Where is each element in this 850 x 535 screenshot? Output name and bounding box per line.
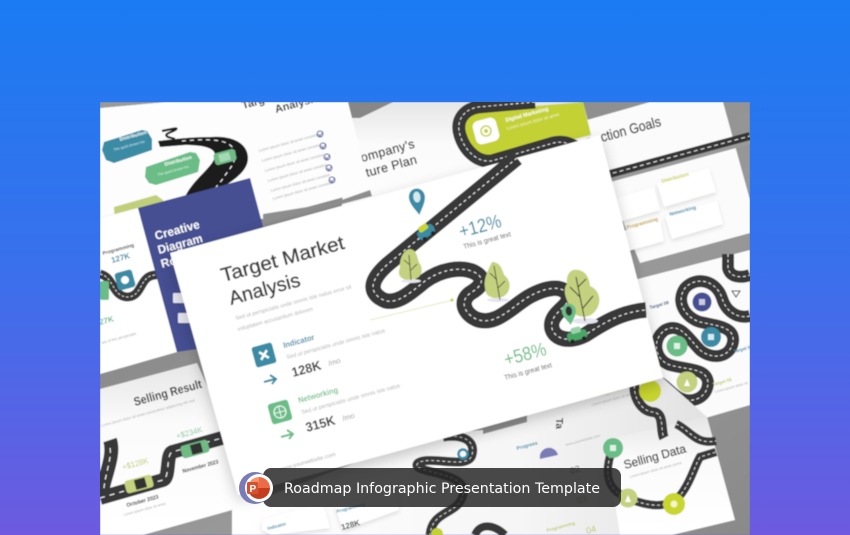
main title — [219, 232, 347, 310]
right card label: Programming — [336, 501, 366, 514]
number 02: 02 — [569, 464, 581, 476]
action goals cards — [621, 186, 723, 252]
yellow node — [639, 380, 661, 402]
blue slide buttons — [173, 293, 190, 323]
tree 1 — [399, 249, 422, 283]
teal callout text: The quick brown fox — [113, 140, 145, 152]
second value: 27K — [98, 314, 115, 327]
collage panel — [98, 92, 754, 535]
left card label: Indicator — [267, 521, 287, 531]
blue circle node — [692, 292, 712, 312]
green callout text: The quick brown fox — [157, 165, 189, 177]
target teal label: Target 04 — [733, 344, 754, 354]
card text: networking: Networking — [669, 205, 697, 218]
checklist heading: Targ — [241, 94, 266, 112]
checklist items — [258, 133, 333, 201]
stat caption: This is great text — [463, 231, 512, 251]
website text: www.yourwebsite.com — [278, 452, 337, 473]
yellow node — [663, 493, 685, 515]
teal pie icon — [114, 269, 136, 291]
selling description: Lorem ipsum dolor sit amet consectetur adipiscing elit sed — [100, 398, 195, 428]
diagram heading: Diagram — [156, 231, 204, 257]
checkmarks — [317, 131, 335, 183]
P letter: P — [250, 484, 256, 495]
indicator label: Indicator — [282, 333, 315, 350]
networking unit: /mo — [341, 411, 356, 423]
networking icon — [267, 399, 293, 425]
progress label: Progress — [516, 440, 539, 452]
left card — [262, 503, 330, 535]
icon: green car — [565, 325, 588, 344]
teal ring node — [458, 450, 468, 458]
value +$128K: +$128K — [121, 456, 150, 472]
dates description: Lorem ipsum dolor sit amet — [123, 502, 166, 517]
main description: voluptatem accusantium dolorem — [237, 306, 314, 333]
selling road — [100, 438, 222, 498]
icon: location pin green — [561, 303, 578, 326]
selling data road — [608, 424, 716, 505]
dotted progress line — [370, 298, 454, 320]
marketing card text: Lorem ipsum dolor sit amet — [506, 112, 560, 131]
tree 3 — [565, 270, 599, 324]
slide: action goals — [587, 102, 750, 263]
action goals road — [606, 136, 750, 178]
olive circle node — [676, 372, 698, 392]
icon: teal car — [414, 220, 437, 243]
selling result title: Selling Result — [132, 377, 203, 409]
website note: www.yourwebsite.com — [565, 434, 601, 447]
company heading: ompany's — [359, 137, 416, 165]
card text: programming: Programming — [626, 217, 659, 231]
tree 2 — [485, 262, 510, 302]
indicator text: Sed ut perspiciatis unde omnis iste natus — [286, 328, 386, 361]
future plan heading: ture Plan — [364, 152, 419, 180]
stat: +58%: +58% — [502, 339, 549, 371]
number 03: 03 — [576, 494, 588, 506]
slide: company future plan — [341, 102, 592, 206]
stat caption: This is great text — [504, 362, 553, 382]
green car — [180, 439, 210, 459]
title banner — [263, 468, 621, 507]
value 127K: 127K — [110, 251, 131, 265]
value +$234K: +$234K — [175, 425, 204, 441]
programming label: Programming — [102, 243, 135, 257]
target 01 label: Target 01 — [599, 387, 620, 397]
green car — [213, 148, 237, 166]
indicator value: 128K — [290, 357, 323, 380]
target olive label: Target 05 — [712, 377, 733, 387]
card text: distribution: Distribution — [661, 172, 690, 185]
stat: +12%: +12% — [457, 211, 504, 243]
yellow node — [431, 528, 443, 535]
green icon — [100, 281, 109, 300]
programming note: ast of the perspiciatis — [101, 332, 137, 345]
analysis heading: Analysis — [274, 92, 320, 116]
indicator icon — [251, 342, 277, 368]
slide: target 01 road — [634, 380, 664, 438]
networking text: Sed ut perspiciatis unde omnis iste natus — [301, 383, 401, 416]
black winding road — [158, 128, 248, 202]
slide: programming road — [98, 208, 177, 374]
banner title: Roadmap Infographic Presentation Template — [284, 481, 600, 497]
olive node — [618, 488, 638, 508]
selling data title: Selling Data — [622, 441, 688, 472]
olive callout — [114, 194, 164, 214]
networking value: 315K — [304, 412, 337, 435]
checklist items: Lorem ipsum dolor sit amet consetur — [267, 163, 328, 183]
yellow marketing card — [464, 102, 591, 159]
checklist items: Lorem ipsum dolor sit amet consetur — [258, 133, 319, 153]
green callout — [145, 152, 200, 185]
target road — [648, 254, 750, 400]
programming row: Programming — [546, 520, 576, 533]
curvy progress road — [417, 436, 505, 535]
purple half circle — [540, 448, 558, 459]
main road — [373, 158, 646, 339]
checklist items: Lorem ipsum dolor sit amet consetur — [261, 143, 322, 163]
main slide: target market analysis — [170, 135, 663, 495]
right card — [335, 490, 399, 532]
creative heading: Creative — [153, 217, 201, 243]
slide: creative diagram — [138, 178, 264, 352]
target 01 text: Lorem ipsum dolor sit amet — [591, 392, 634, 407]
slide: bottom centre — [232, 378, 707, 535]
green callout title: Distribution — [164, 155, 193, 168]
slide: target roadmap — [630, 250, 754, 440]
november label: November 2023 — [182, 459, 219, 475]
main description: Sed ut perspiciatis unde omnis iste natus error sit — [235, 284, 353, 322]
action goals title: ction Goals — [599, 113, 663, 145]
networking label: Networking — [297, 385, 339, 405]
arrow: green — [281, 430, 293, 439]
purple half circle — [239, 472, 271, 504]
marketing road — [459, 102, 580, 161]
october label: October 2023 — [126, 494, 159, 509]
main title: Analysis — [227, 269, 303, 310]
right card value: 128K — [340, 518, 361, 532]
green circle node — [666, 336, 688, 356]
checklist items: Lorem ipsum dolor sit amet consetur — [264, 153, 325, 173]
checklist items: Lorem ipsum dolor sit amet consetur — [270, 173, 331, 193]
programming road — [100, 272, 165, 297]
teal circle node — [701, 327, 721, 347]
teal callout — [102, 130, 152, 163]
olive car — [124, 474, 154, 494]
arrow: teal — [264, 375, 276, 384]
slide: selling data — [603, 417, 735, 535]
slide: selling result — [100, 363, 260, 535]
target 09 label: Target 09 — [649, 300, 670, 310]
target 01 slide heading: Ta — [553, 418, 564, 429]
checklist items: Lorem ipsum dolor sit amet consetur — [272, 181, 333, 201]
target olive text: Lorem ipsum dolor sit — [714, 381, 748, 394]
triangle icon — [732, 291, 740, 297]
marketing card title: Digital Marketing — [505, 106, 549, 124]
green node — [603, 438, 623, 458]
main title: Target Market — [219, 232, 347, 287]
roadmap heading: Roadmap — [159, 243, 216, 271]
slide: checklist road — [100, 102, 372, 220]
icon: location pin teal — [408, 187, 427, 216]
marketing icon — [471, 116, 501, 146]
indicator unit: /mo — [327, 356, 342, 368]
icon: PowerPoint — [245, 474, 273, 502]
selling data text: Lorem ipsum dolor sit amet conse — [629, 461, 682, 479]
teal callout title: Distribution — [119, 130, 148, 143]
